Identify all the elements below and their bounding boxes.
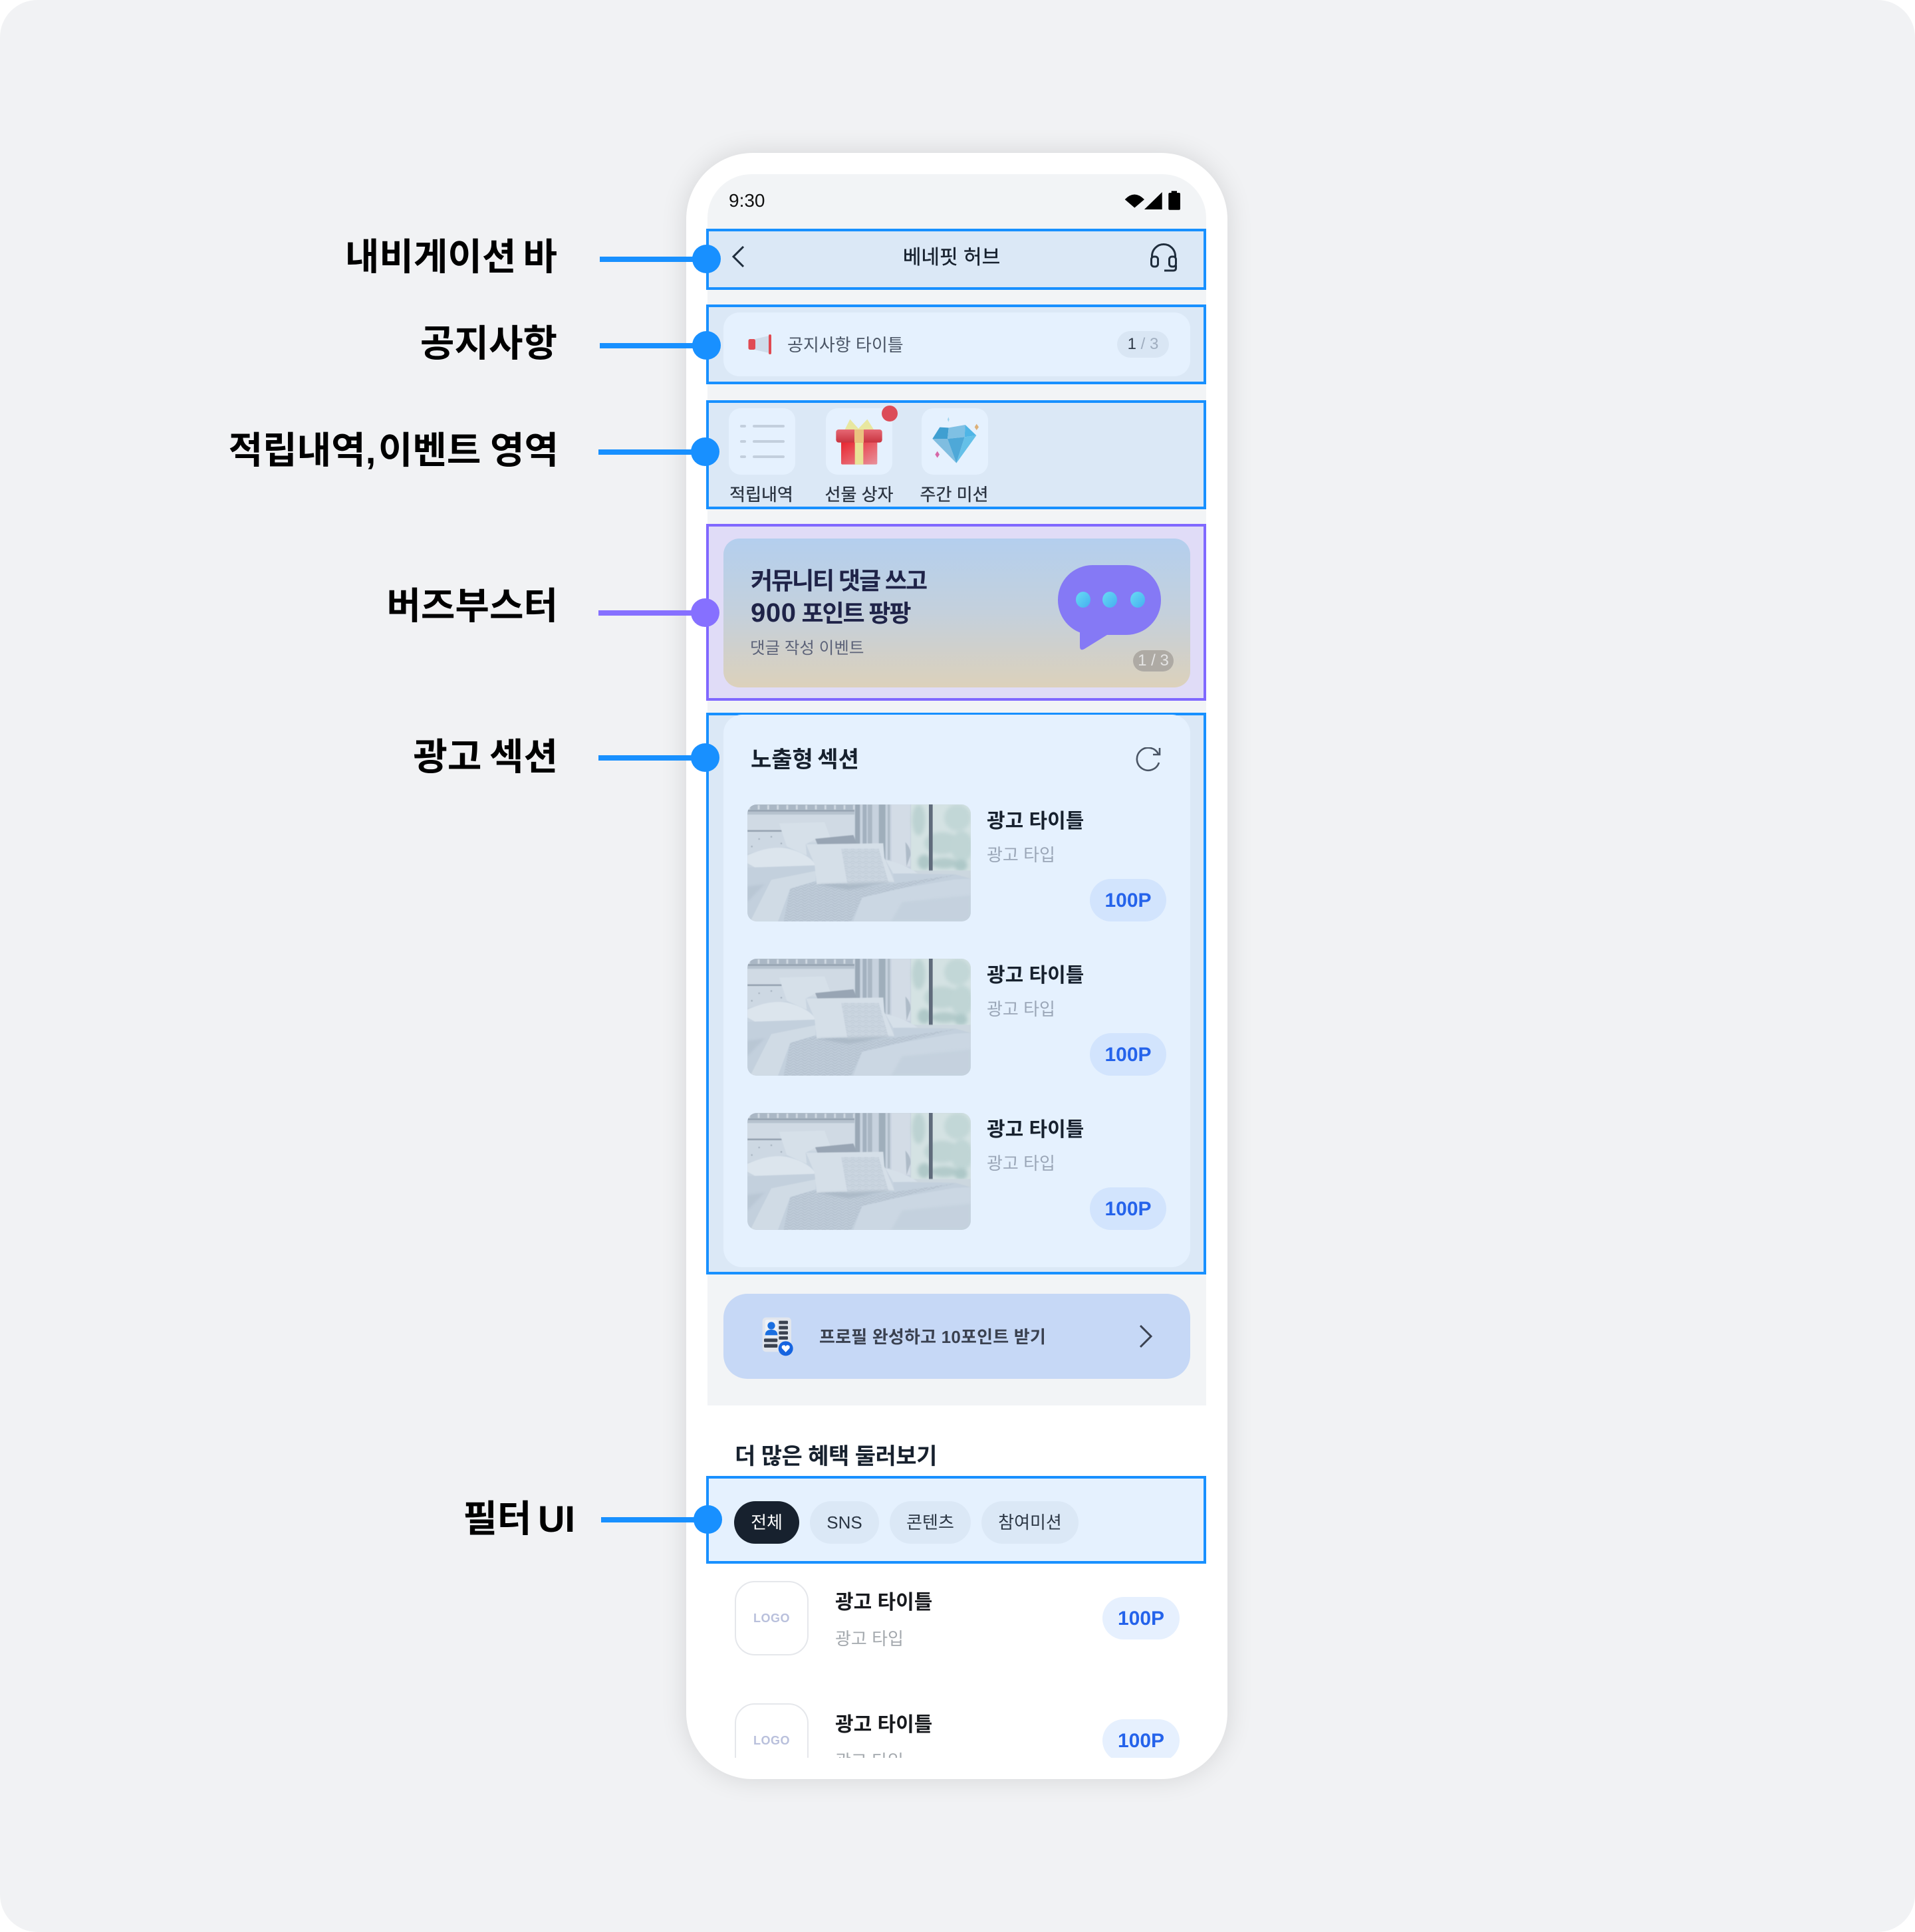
filter chip: mission: 참여미션 <box>998 1512 1062 1532</box>
panel: navigation bar <box>706 229 1206 290</box>
menu label: weekly mission: 주간 미션 <box>920 485 988 505</box>
points pill: 100P <box>1118 1608 1164 1630</box>
points pill: 100P <box>1118 1730 1164 1752</box>
panel: buzz booster <box>706 524 1206 701</box>
list item title: 광고 타이틀 <box>835 1714 932 1736</box>
ad image: bedroom <box>747 959 971 1076</box>
status time: 9:30 <box>729 190 765 211</box>
panel: ad section <box>706 713 1206 1274</box>
points pill: 100P <box>1104 1044 1152 1066</box>
ad type: 광고 타입 <box>987 1153 1055 1173</box>
ad row 3 <box>747 1113 1166 1230</box>
label: points history and events: 적립내역, 이벤트 영역 <box>229 429 559 471</box>
banner headline <box>751 567 927 628</box>
nav title: 베네핏 허브 <box>903 247 1000 269</box>
icon: refresh <box>1136 747 1161 771</box>
label: notice: 공지사항 <box>420 322 557 364</box>
icon: profile document <box>762 1318 793 1356</box>
ad title: 광고 타이틀 <box>987 965 1084 987</box>
filter chip: SNS: SNS <box>827 1512 862 1532</box>
banner counter pill: 1 / 3 <box>1138 652 1169 669</box>
notice counter pill: 1 / 3 <box>1128 335 1158 353</box>
label: filter UI: 필터 UI <box>463 1498 575 1540</box>
logo tile: LOGO <box>753 1612 790 1625</box>
connector line <box>600 343 706 348</box>
ad title: 광고 타이틀 <box>987 810 1084 832</box>
connector: points history and events <box>598 437 719 466</box>
connector dot <box>691 743 719 772</box>
points pill <box>1102 1719 1180 1762</box>
phone shell <box>686 153 1227 1779</box>
label: navigation bar: 내비게이션 바 <box>345 236 557 278</box>
points pill <box>1090 1187 1166 1230</box>
points pill: 100P <box>1104 890 1152 911</box>
ad section heading: 노출형 섹션 <box>751 747 859 773</box>
icon: list <box>740 425 785 458</box>
logo tile: LOGO <box>753 1734 790 1747</box>
menu: gift box icon <box>826 408 892 475</box>
banner counter pill <box>1133 650 1174 671</box>
connector: ad section <box>598 743 719 772</box>
status icons: wifi, signal, battery <box>1125 191 1180 210</box>
ad type: 광고 타입 <box>987 845 1055 865</box>
label: buzz booster: 버즈부스터 <box>386 585 558 627</box>
ad section card <box>723 715 1190 1267</box>
banner subtext: 댓글 작성 이벤트 <box>750 640 864 658</box>
buzz booster banner card <box>723 539 1190 687</box>
icon: back chevron <box>732 246 744 267</box>
points pill <box>1090 1033 1166 1076</box>
connector: buzz booster <box>598 598 719 627</box>
ad title: 광고 타이틀 <box>987 1119 1084 1141</box>
filter chip: content: 콘텐츠 <box>906 1512 954 1532</box>
logo tile <box>735 1581 809 1655</box>
icon: diamond <box>932 418 979 463</box>
connector: notice <box>600 331 721 360</box>
menu label: points history: 적립내역 <box>729 485 793 505</box>
filter chip: all (selected): 전체 <box>751 1512 783 1532</box>
ad row 1 <box>747 804 1166 921</box>
ad type: 광고 타입 <box>987 999 1055 1019</box>
icon: gift <box>836 419 882 465</box>
points pill: 100P <box>1104 1198 1152 1220</box>
list row 2 <box>735 1703 1180 1758</box>
icon: notification dot <box>882 406 898 422</box>
logo tile <box>735 1703 809 1778</box>
connector line <box>601 1517 707 1522</box>
points pill <box>1090 879 1166 921</box>
panel: points history and events <box>706 400 1206 509</box>
panel: notice <box>706 304 1206 384</box>
connector: filter UI <box>601 1505 722 1534</box>
icon: megaphone <box>749 334 771 354</box>
filter chip: all (selected) <box>734 1501 799 1544</box>
connector line <box>598 755 705 761</box>
label: ad section: 광고 섹션 <box>413 736 558 778</box>
more benefits heading: 더 많은 혜택 둘러보기 <box>735 1444 937 1469</box>
profile completion banner <box>723 1294 1190 1379</box>
connector dot <box>694 1505 722 1534</box>
list row 1 <box>735 1581 1180 1655</box>
ad image: bedroom <box>747 1113 971 1230</box>
connector line <box>600 257 706 262</box>
banner headline: 900 포인트 팡팡 <box>751 598 910 628</box>
banner text: 프로필 완성하고 10포인트 받기 <box>819 1327 1046 1347</box>
notice counter pill <box>1117 331 1169 358</box>
connector line <box>598 610 705 616</box>
connector line <box>598 449 705 455</box>
panel: filter UI <box>706 1476 1206 1564</box>
connector dot <box>692 245 721 273</box>
connector dot <box>691 598 719 627</box>
filter chip: mission <box>981 1501 1079 1544</box>
filter chip: SNS <box>810 1501 879 1544</box>
menu: points history icon <box>729 408 795 475</box>
connector dot <box>692 331 721 360</box>
benefits list (clipped) <box>735 1581 1180 1758</box>
notice card <box>723 312 1190 376</box>
list item title: 광고 타이틀 <box>835 1592 932 1614</box>
points pill <box>1102 1597 1180 1639</box>
filter chip: content <box>890 1501 971 1544</box>
notice title: 공지사항 타이틀 <box>787 335 904 355</box>
icon: speech bubble <box>1058 565 1161 650</box>
menu: weekly mission icon <box>922 408 988 475</box>
icon: chevron right <box>1140 1325 1152 1348</box>
ad image: bedroom <box>747 804 971 921</box>
icon: headset <box>1150 243 1177 271</box>
connector: navigation bar <box>600 245 721 273</box>
ad row 2 <box>747 959 1166 1076</box>
banner headline: 커뮤니티 댓글 쓰고 <box>751 567 926 594</box>
phone screen top background <box>707 174 1206 1405</box>
connector dot <box>691 437 719 466</box>
menu label: gift box: 선물 상자 <box>825 485 893 505</box>
list item type: 광고 타입 <box>835 1629 904 1649</box>
